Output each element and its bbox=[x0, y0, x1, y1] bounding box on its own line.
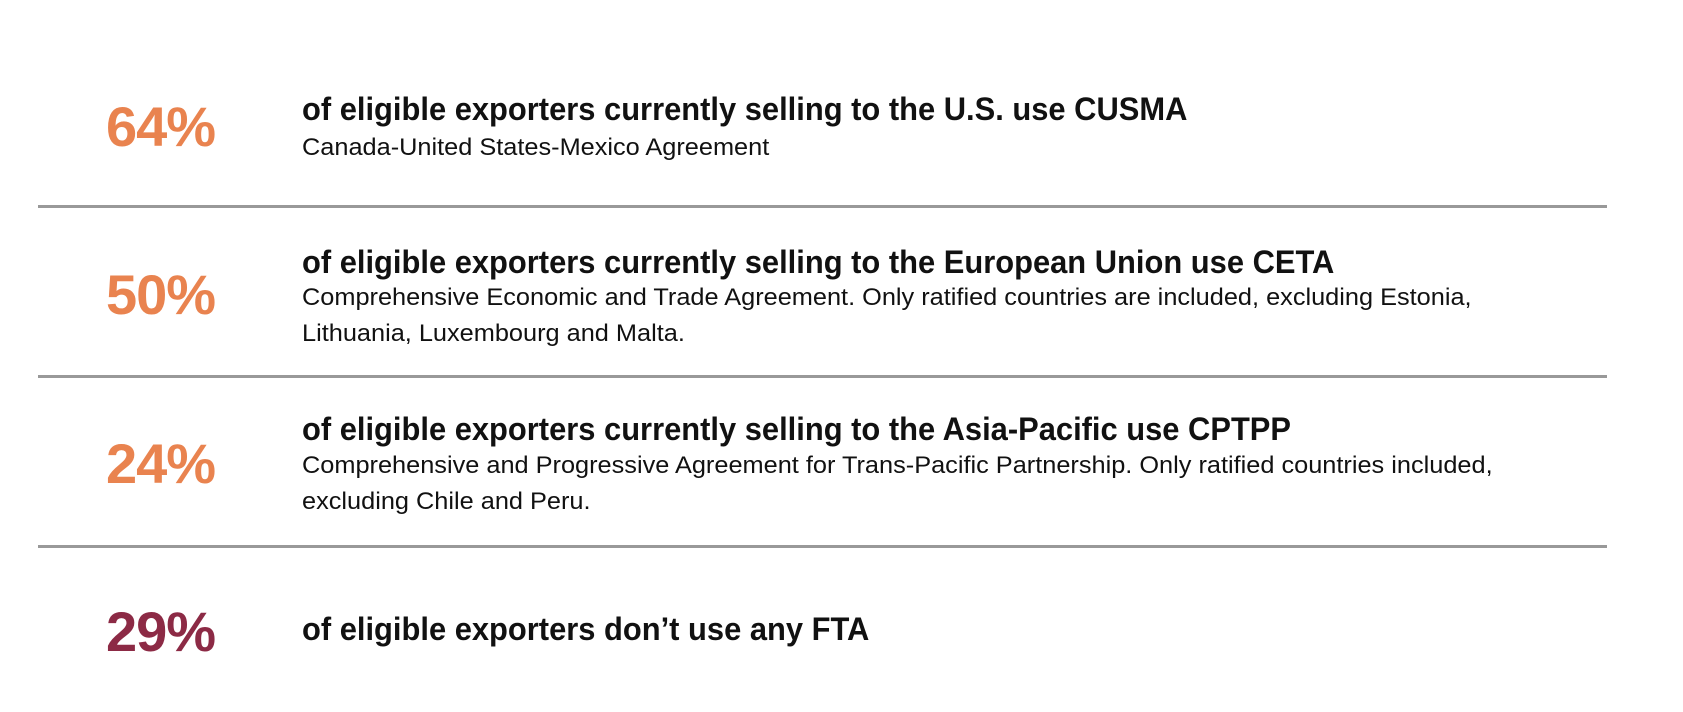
percentage 29%: 29% bbox=[106, 600, 215, 663]
subtext CETA: Comprehensive Economic and Trade Agreement. Only ratified countries are included, excluding Estonia, bbox=[302, 284, 1472, 311]
percentage 24%: 24% bbox=[106, 432, 215, 495]
subtext CPTPP: Comprehensive and Progressive Agreement for Trans-Pacific Partnership. Only ratified countries included, bbox=[302, 452, 1493, 479]
subtext CPTPP bbox=[302, 452, 1493, 515]
row: no FTA bbox=[106, 600, 869, 663]
headline no FTA: of eligible exporters don’t use any FTA bbox=[302, 611, 869, 647]
headline CETA: of eligible exporters currently selling to the European Union use CETA bbox=[302, 244, 1334, 280]
headline CPTPP: of eligible exporters currently selling to the Asia-Pacific use CPTPP bbox=[302, 411, 1291, 447]
row: CUSMA bbox=[106, 91, 1187, 161]
percentage 50%: 50% bbox=[106, 263, 215, 326]
subtext CPTPP: excluding Chile and Peru. bbox=[302, 488, 591, 515]
headline CUSMA: of eligible exporters currently selling to the U.S. use CUSMA bbox=[302, 91, 1187, 127]
subtext CETA bbox=[302, 284, 1472, 347]
subtext CETA: Lithuania, Luxembourg and Malta. bbox=[302, 320, 685, 347]
row: CPTPP bbox=[106, 411, 1493, 515]
subtext CUSMA: Canada-United States-Mexico Agreement bbox=[302, 134, 769, 161]
percentage 64%: 64% bbox=[106, 95, 215, 158]
row: CETA bbox=[106, 244, 1472, 347]
